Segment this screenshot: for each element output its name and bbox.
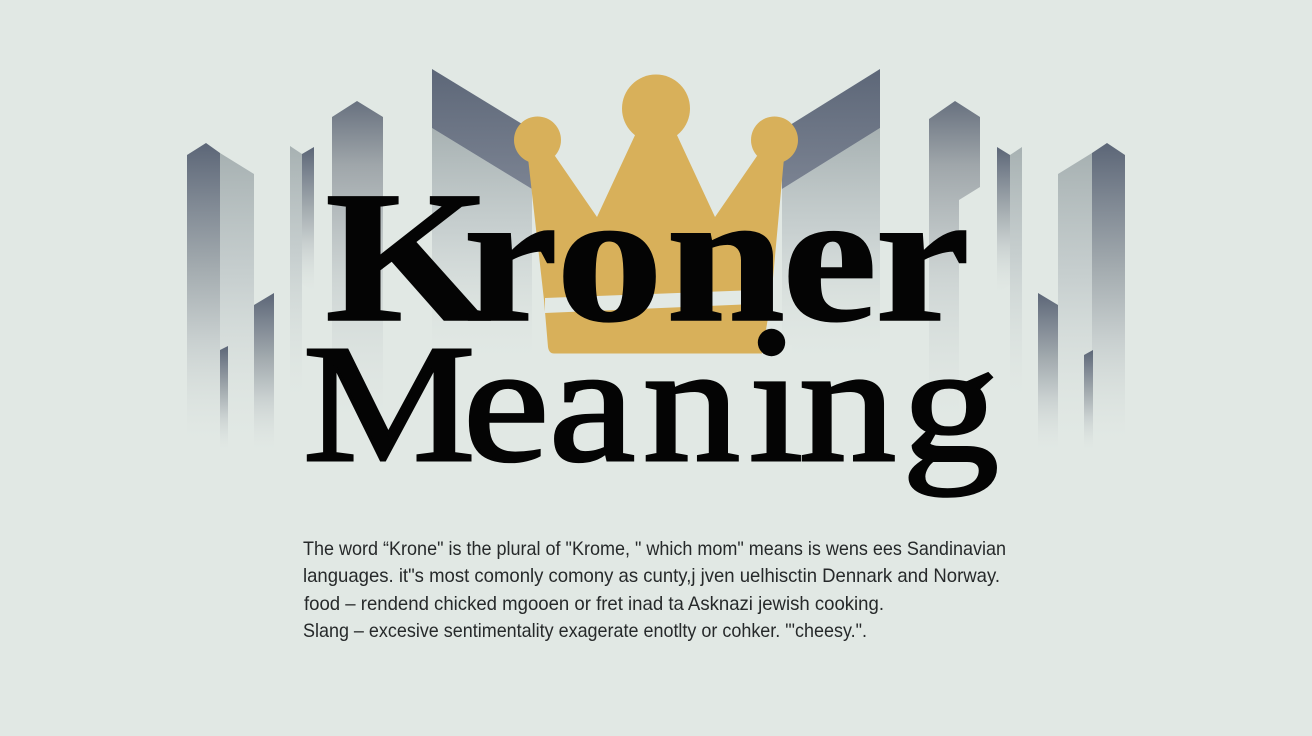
building: left tall tower <box>187 143 254 440</box>
building: left short tower <box>254 293 274 450</box>
building: right narrow tower <box>997 147 1022 400</box>
title: Kroner: Kroner <box>325 152 970 361</box>
text block: definitions: The word “Krone" is the plural of "Krome, " which mom" means is wens ees Sandinavian <box>303 538 1006 560</box>
buildings: left skyline <box>187 69 532 450</box>
icon: gold crown <box>514 74 798 354</box>
building: left narrow tower <box>290 146 314 400</box>
building: left small sliver <box>220 346 228 450</box>
text block: definitions: food – rendend chicked mgooen or fret inad ta Asknazi jewish cooking. <box>304 593 884 615</box>
building: right large angled block <box>782 69 880 360</box>
building: right tall tower <box>1058 143 1125 440</box>
text block: definitions: Slang – excesive sentimentality exagerate enotlty or cohker. "'cheesy.". <box>303 620 867 642</box>
dot of the letter i <box>758 329 785 356</box>
buildings: right skyline <box>782 69 1125 450</box>
text block: definitions: languages. it"s most comonly comony as cunty,j jven uelhisctin Dennark and Norway. <box>303 565 1000 587</box>
building: right small sliver <box>1084 350 1093 450</box>
building: left mid tower <box>332 101 383 420</box>
mask over default i dot <box>758 345 792 369</box>
building: left large angled block <box>432 69 532 360</box>
text block: definitions <box>303 538 1006 642</box>
building: right short tower <box>1038 293 1058 450</box>
title: Meaning: Meaning <box>303 311 999 497</box>
building: right mid tower <box>929 101 980 420</box>
